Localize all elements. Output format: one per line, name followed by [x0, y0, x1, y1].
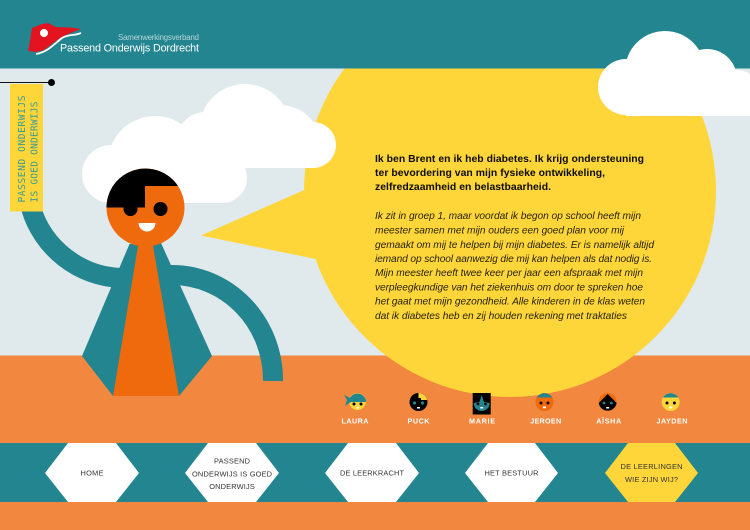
header band — [0, 0, 750, 68]
speech body: verpleegkundige van het ziekenhuis om door te spreken hoe — [375, 282, 643, 294]
icon: Laura — [344, 393, 366, 410]
logo text — [60, 33, 199, 54]
nav: home: HOME — [80, 469, 104, 478]
banner — [0, 79, 55, 212]
student names: LAURA — [342, 416, 368, 426]
speech text — [375, 154, 654, 322]
eyes — [124, 202, 168, 216]
banner text: IS GOED ONDERWIJS — [30, 101, 40, 202]
mouth — [138, 223, 156, 232]
cloud: behind character — [82, 84, 336, 210]
nav: het bestuur: HET BESTUUR — [484, 469, 538, 478]
icon: Aisha — [599, 393, 617, 411]
icon: Jayden — [662, 393, 680, 411]
logo text: Passend Onderwijs Dordrecht — [60, 42, 199, 54]
banner pole — [0, 82, 50, 84]
icon: Puck — [410, 393, 428, 411]
student names: MARIE — [469, 416, 495, 426]
banner flag — [10, 84, 43, 212]
banner text: PASSEND ONDERWIJS — [17, 95, 28, 202]
icon: Jeroen — [536, 393, 554, 411]
logo — [28, 23, 199, 54]
nav: home — [45, 443, 139, 502]
speech body: meester samen met mijn ouders een goed plan voor mij — [375, 226, 625, 236]
nav: de leerlingen: WIE ZIJN WIJ? — [625, 475, 678, 484]
nav: passend onderwijs: ONDERWIJS — [209, 482, 255, 491]
speech body: het gaat met mijn gezondheid. Alle kinderen in de klas weten — [375, 297, 645, 308]
speech heading — [375, 154, 644, 193]
student names: PUCK — [408, 416, 430, 426]
nav: passend onderwijs: PASSEND — [214, 457, 250, 466]
speech heading: ter bevordering van mijn fysieke ontwikkeling, — [375, 168, 605, 179]
nav: passend onderwijs: ONDERWIJS IS GOED — [192, 470, 272, 478]
nav: passend onderwijs — [185, 443, 279, 502]
logo mark — [28, 23, 81, 54]
student names: JAYDEN — [656, 416, 688, 426]
speech body: gemaakt om mij te helpen bij mijn diabetes. Er is namelijk altijd — [375, 240, 654, 251]
character: Brent — [31, 168, 273, 396]
student names: JEROEN — [530, 416, 561, 426]
logo text: Samenwerkingsverband — [118, 33, 199, 42]
shirt — [113, 240, 179, 396]
jacket — [82, 243, 212, 396]
speech body: dat ik diabetes heb en zij houden rekening met traktaties — [375, 311, 627, 322]
icon: Marie — [473, 393, 491, 414]
speech heading: Ik ben Brent en ik heb diabetes. Ik krijg ondersteuning — [375, 154, 644, 165]
hair — [106, 169, 178, 208]
head — [106, 168, 184, 246]
speech body: Mijn meester heeft twee keer per jaar een afspraak met mijn — [375, 268, 643, 279]
banner pole end — [48, 79, 55, 86]
orange floor — [0, 356, 750, 530]
student names: AÏSHA — [596, 416, 621, 426]
nav: de leerkracht — [325, 443, 419, 502]
right arm — [165, 275, 273, 381]
speech body: Ik zit in groep 1, maar voordat ik begon op school heeft mijn — [375, 211, 641, 222]
banner text — [17, 95, 40, 202]
cloud: top right — [598, 31, 750, 116]
nav: het bestuur — [465, 443, 558, 502]
nav: de leerlingen: DE LEERLINGEN — [620, 462, 682, 471]
navigation band — [0, 443, 750, 502]
nav: de leerlingen — [605, 443, 698, 502]
left arm — [31, 208, 120, 278]
speech body — [375, 211, 654, 322]
speech bubble — [201, 0, 716, 397]
nav: de leerkracht: DE LEERKRACHT — [340, 469, 404, 478]
student names — [342, 416, 688, 426]
speech heading: zelfredzaamheid en belastbaarheid. — [375, 182, 551, 193]
speech body: iemand op school aanwezig die mij kan helpen als dat nodig is. — [375, 254, 652, 265]
background sky — [0, 68, 750, 356]
